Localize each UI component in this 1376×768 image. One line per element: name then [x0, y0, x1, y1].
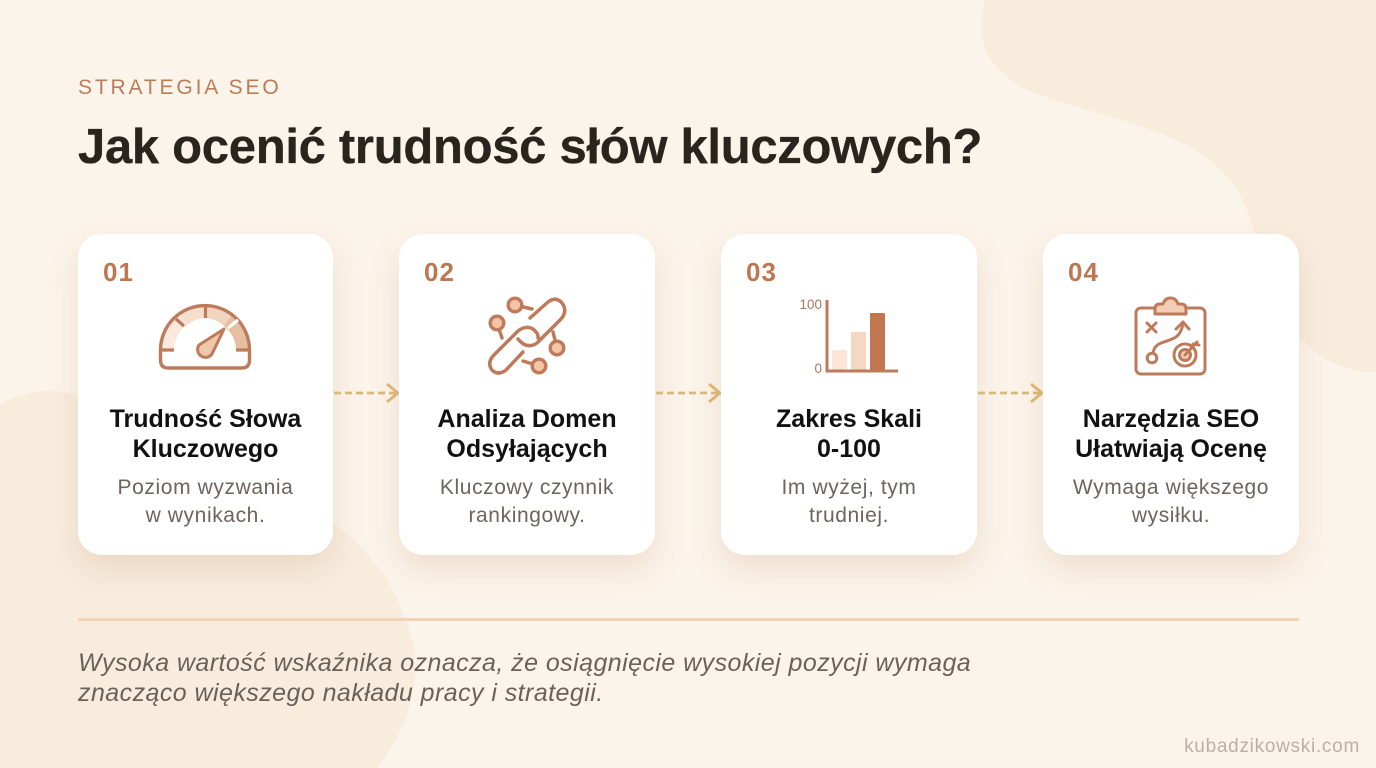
panel: card 3: [721, 234, 977, 555]
card 2 heading: [437, 405, 617, 463]
card 1 heading: [110, 405, 302, 463]
arrow 1: [334, 383, 399, 403]
icon: bar chart 0-100: 0: [814, 361, 822, 376]
card 3 heading: [776, 405, 922, 463]
card 2 heading: Analiza Domen: [437, 405, 617, 433]
panel: card 1: [78, 234, 333, 555]
icon: bar chart 0-100: [799, 297, 898, 376]
card 1 description: Poziom wyzwania: [118, 476, 293, 499]
card 4 heading: Ułatwiają Ocenę: [1075, 435, 1267, 463]
card 3 heading: Zakres Skali: [776, 405, 922, 433]
card 4 description: Wymaga większego: [1073, 476, 1269, 499]
card 1 description: [118, 476, 293, 527]
arrow 2: [656, 383, 721, 403]
card 3 description: trudniej.: [809, 504, 889, 527]
title: Jak ocenić trudność słów kluczowych?: [78, 120, 982, 174]
icon: bar chart 0-100: 100: [799, 297, 822, 312]
watermark: kubadzikowski.com: [1184, 736, 1360, 757]
divider: [78, 618, 1299, 620]
card 2 description: [440, 476, 614, 527]
card 2 description: Kluczowy czynnik: [440, 476, 614, 499]
card 3 description: Im wyżej, tym: [782, 476, 916, 499]
card 4 description: [1073, 476, 1269, 527]
card 4 heading: Narzędzia SEO: [1083, 405, 1259, 433]
card 1 description: w wynikach.: [146, 504, 265, 527]
card 2 heading: Odsyłających: [446, 435, 608, 463]
icon: gauge: [158, 304, 252, 370]
card 1 heading: Kluczowego: [133, 435, 278, 463]
arrow 3: [978, 383, 1043, 403]
panel: card 2: [399, 234, 655, 555]
card 2 description: rankingowy.: [468, 504, 586, 527]
card 3 heading: 0-100: [817, 435, 881, 463]
summary text: znacząco większego nakładu pracy i strategii.: [78, 679, 604, 707]
summary text: Wysoka wartość wskaźnika oznacza, że osiągnięcie wysokiej pozycji wymaga: [78, 649, 971, 677]
card 3 description: [782, 476, 916, 527]
summary text: [78, 649, 971, 707]
eyebrow label: STRATEGIA SEO: [78, 76, 282, 99]
card 4 heading: [1075, 405, 1267, 463]
icon: clipboard with strategy and target: [1134, 296, 1206, 376]
card 4 description: wysiłku.: [1132, 504, 1210, 527]
step number 01: 01: [103, 257, 134, 287]
step number 02: 02: [424, 257, 455, 287]
icon: chain links: [488, 296, 567, 375]
step number 03: 03: [746, 257, 777, 287]
panel: card 4: [1043, 234, 1299, 555]
card 1 heading: Trudność Słowa: [110, 405, 301, 433]
step number 04: 04: [1068, 257, 1099, 287]
